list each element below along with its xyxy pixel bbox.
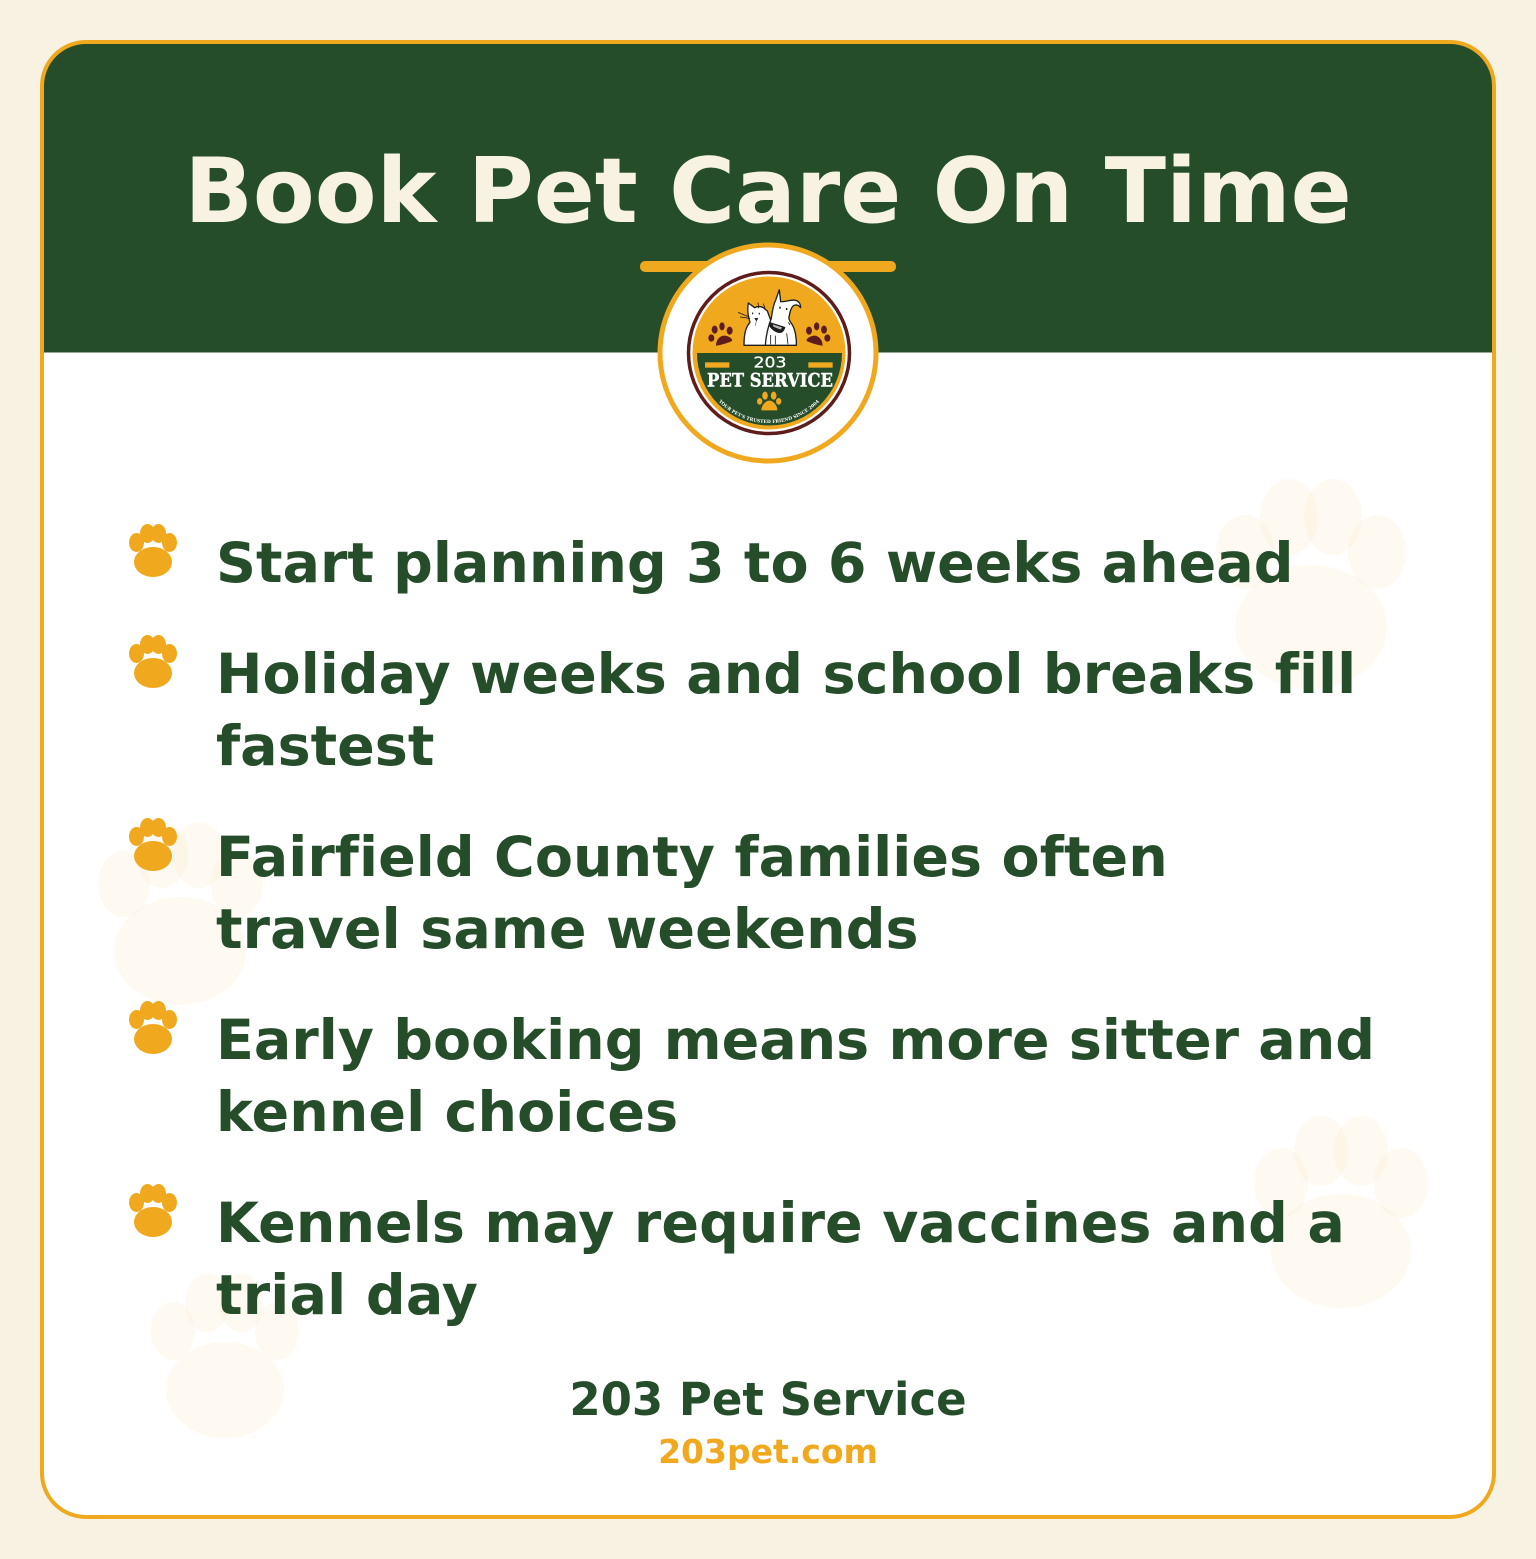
title underline — [640, 261, 896, 272]
watermark paw: lower right — [1254, 1116, 1428, 1308]
text: travel same weekends — [216, 897, 919, 962]
logo ring — [688, 272, 850, 434]
text: Fairfield County families often — [216, 825, 1168, 890]
text — [216, 825, 1168, 962]
bullet 2 — [129, 635, 1356, 779]
text: kennel choices — [216, 1080, 678, 1145]
text: Early booking means more sitter and — [216, 1008, 1375, 1073]
icon: paw — [129, 1001, 177, 1054]
footer: website: 203pet.com — [658, 1432, 878, 1471]
text: Holiday weeks and school breaks fill — [216, 642, 1356, 707]
bullet 3 — [129, 818, 1168, 962]
logo lower green panel — [697, 353, 842, 426]
icon: paw — [129, 1184, 177, 1237]
text: trial day — [216, 1263, 478, 1328]
logo text: tagline: YOUR PET'S TRUSTED FRIEND SINCE 2004 — [719, 399, 820, 423]
text — [216, 642, 1356, 779]
footer: brand name: 203 Pet Service — [569, 1373, 967, 1426]
text: Kennels may require vaccines and a — [216, 1191, 1345, 1256]
logo badge — [658, 242, 878, 464]
watermark paw: top right — [1216, 479, 1406, 689]
logo disc — [692, 276, 846, 430]
text: fastest — [216, 714, 434, 779]
watermark paw: bottom left — [151, 1274, 299, 1438]
title: Book Pet Care On Time — [184, 139, 1352, 244]
text: Start planning 3 to 6 weeks ahead — [216, 531, 1293, 596]
logo paws — [705, 322, 833, 410]
watermark paw: middle left — [98, 822, 263, 1005]
logo artwork: cat and dog — [738, 290, 801, 345]
bullet 1 — [129, 524, 1293, 596]
bullet 5 — [129, 1184, 1345, 1328]
text — [216, 1191, 1345, 1328]
text — [216, 1008, 1375, 1145]
header band — [42, 42, 1494, 352]
logo text: pet service: PET SERVICE — [707, 371, 833, 392]
icon: paw — [129, 524, 177, 577]
logo text: 203: 203 — [754, 354, 786, 372]
bullet 4 — [129, 1001, 1375, 1145]
icon: paw — [129, 818, 177, 871]
icon: paw — [129, 635, 177, 688]
